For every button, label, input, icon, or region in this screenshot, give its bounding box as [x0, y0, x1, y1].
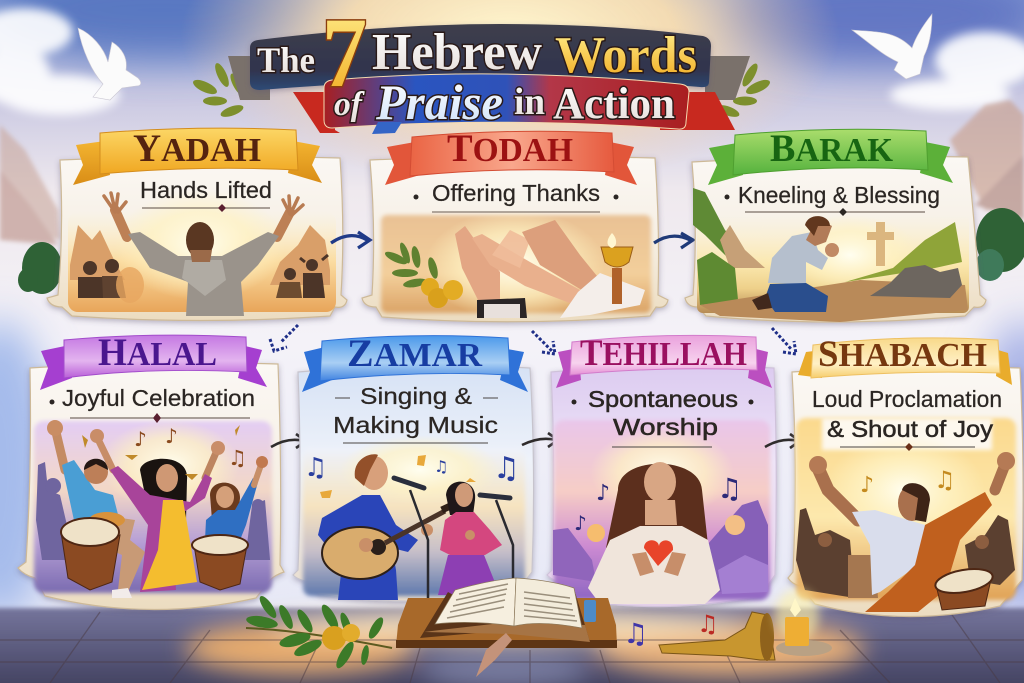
- subheading: Hands Lifted: [140, 177, 272, 203]
- music notes: ♫: [304, 453, 327, 483]
- illustration: Zamar scene: [303, 435, 525, 600]
- icon: music note blue: ♫: [623, 617, 648, 650]
- icon: dove left: [78, 28, 141, 100]
- arrow: [271, 434, 306, 448]
- kneeling man: [752, 216, 839, 312]
- icon: dove right: [852, 14, 932, 79]
- icon: candle: [775, 589, 832, 656]
- panel: Tehillah: [547, 333, 776, 607]
- music notes: ♫: [228, 446, 247, 470]
- background crowd: [36, 462, 270, 560]
- music notes: [574, 472, 742, 535]
- illustration: Shabach scene: [796, 418, 1016, 612]
- arrow: [532, 331, 555, 354]
- illustration: Todah scene: [381, 210, 651, 320]
- heading: TODAH: [447, 127, 573, 170]
- microphones and stands: [394, 478, 513, 600]
- panel: Todah: [362, 127, 668, 322]
- ribbon: [708, 129, 953, 185]
- heading: TEHILLAH: [580, 333, 747, 374]
- title text line 1: Words: [555, 27, 697, 84]
- title laurel leaves: [191, 61, 772, 119]
- arrow: [654, 233, 693, 248]
- illustration: Tehillah scene: [553, 420, 770, 604]
- subheading: Offering Thanks: [432, 180, 600, 206]
- title text line 2: [334, 74, 675, 130]
- music notes: ♫: [717, 472, 742, 505]
- heading: HALAL: [98, 331, 217, 374]
- purple rocks: [553, 500, 768, 594]
- subheading: Kneeling & Blessing: [738, 182, 940, 208]
- ribbon: [385, 131, 637, 185]
- subheading: [812, 386, 1002, 451]
- title text line 2: Action: [553, 79, 675, 128]
- arrow: [331, 232, 370, 248]
- crowd: [796, 508, 1015, 598]
- ribbon: [40, 335, 267, 390]
- subheading: Singing &: [360, 383, 472, 409]
- illustration: Barak scene: [693, 188, 969, 322]
- music notes: [860, 466, 956, 498]
- heading: BARAK: [770, 127, 894, 170]
- panel: Zamar: [293, 332, 534, 601]
- panel: Shabach: [788, 334, 1023, 617]
- icon: horn: [659, 612, 775, 661]
- open book on stand: [396, 578, 617, 677]
- arrow: [270, 325, 298, 351]
- title text line 1: The: [257, 40, 315, 80]
- title text line 2: Praise: [375, 74, 503, 130]
- title text line 1: Hebrew: [372, 24, 542, 81]
- illustration: Yadah scene: [68, 190, 336, 316]
- heading: YADAH: [133, 127, 261, 170]
- music notes: ♪: [596, 481, 610, 506]
- heading: SHABACH: [818, 334, 987, 375]
- ribbon: [302, 336, 528, 392]
- arrow: [772, 328, 796, 354]
- subheading: [572, 386, 754, 447]
- subheading: Joyful Celebration: [62, 385, 255, 411]
- olive branch: [383, 241, 463, 308]
- subheading: Worship: [613, 414, 718, 440]
- illustration: Halal scene: [34, 420, 272, 598]
- music notes: ♪: [134, 427, 147, 451]
- title text line 2: in: [514, 81, 545, 123]
- olive branch: [245, 594, 392, 670]
- woman with arms raised: [90, 429, 225, 592]
- icon: music note red: ♫: [697, 610, 719, 638]
- music notes: ♫: [934, 466, 956, 494]
- panel: Barak: [685, 127, 986, 322]
- shouting man: [809, 452, 1015, 612]
- drum: [934, 565, 994, 610]
- guitarist: [318, 454, 454, 600]
- arrow: [765, 434, 800, 448]
- title text line 1: 7: [322, 0, 367, 108]
- title banner: [191, 0, 772, 134]
- music notes: ♫: [493, 451, 520, 486]
- music notes: ♫: [434, 457, 448, 476]
- subheading: Spontaneous: [588, 386, 738, 412]
- singer: [438, 482, 502, 595]
- girl with drum: [192, 456, 268, 590]
- subheading: & Shout of Joy: [827, 416, 994, 442]
- panel: Yadah: [47, 127, 347, 320]
- ribbon: [798, 338, 1012, 385]
- man with drum: [47, 420, 145, 598]
- music notes: [304, 451, 520, 486]
- music notes: [134, 424, 247, 470]
- subheading: Making Music: [333, 412, 498, 438]
- man with hands lifted: [104, 193, 303, 316]
- music notes: ♪: [860, 473, 874, 498]
- heading: ZAMAR: [347, 332, 482, 375]
- music notes: ♪: [574, 511, 587, 535]
- ribbon: [73, 128, 322, 185]
- panel: Halal: [18, 331, 284, 610]
- music notes: ♪: [165, 424, 178, 448]
- title text line 1: [257, 0, 697, 108]
- title text line 2: of: [334, 86, 366, 123]
- woman with hands on heart: [588, 462, 720, 604]
- arrow: [522, 433, 558, 447]
- ribbon: [556, 335, 772, 388]
- subheading: [333, 383, 498, 443]
- golden cup: [601, 233, 633, 304]
- subheading: Loud Proclamation: [812, 386, 1002, 412]
